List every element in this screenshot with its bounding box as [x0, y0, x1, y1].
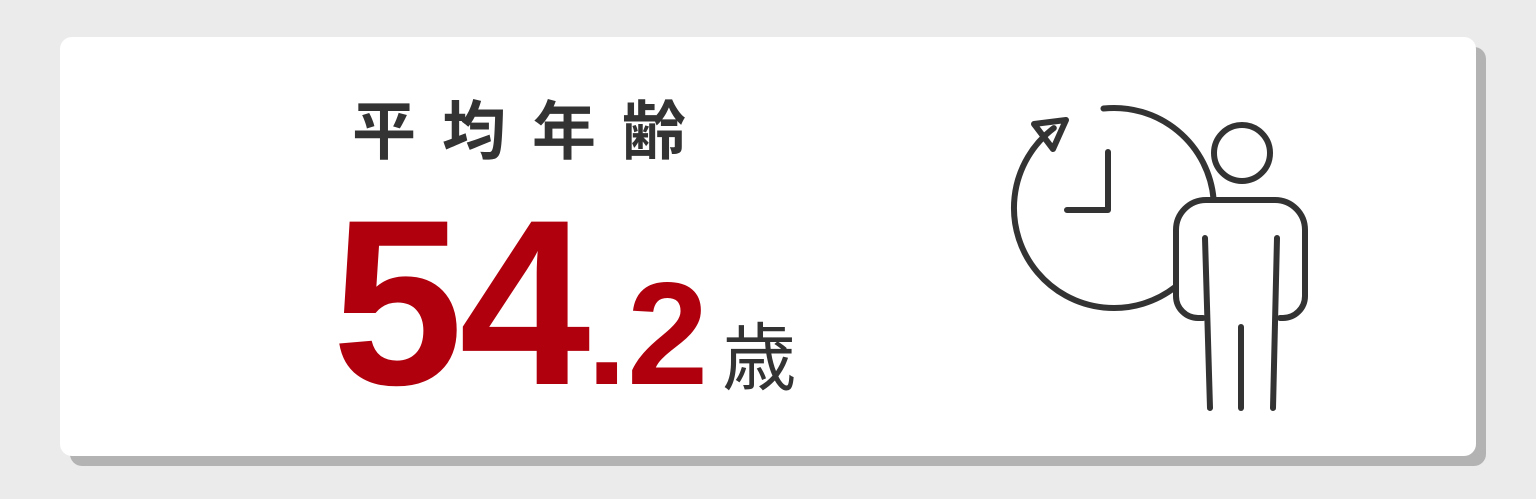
card panel	[60, 37, 1476, 456]
big number 54.2 years: 54.2歳	[332, 171, 796, 435]
heading: average age: 平均年齢	[352, 81, 712, 173]
